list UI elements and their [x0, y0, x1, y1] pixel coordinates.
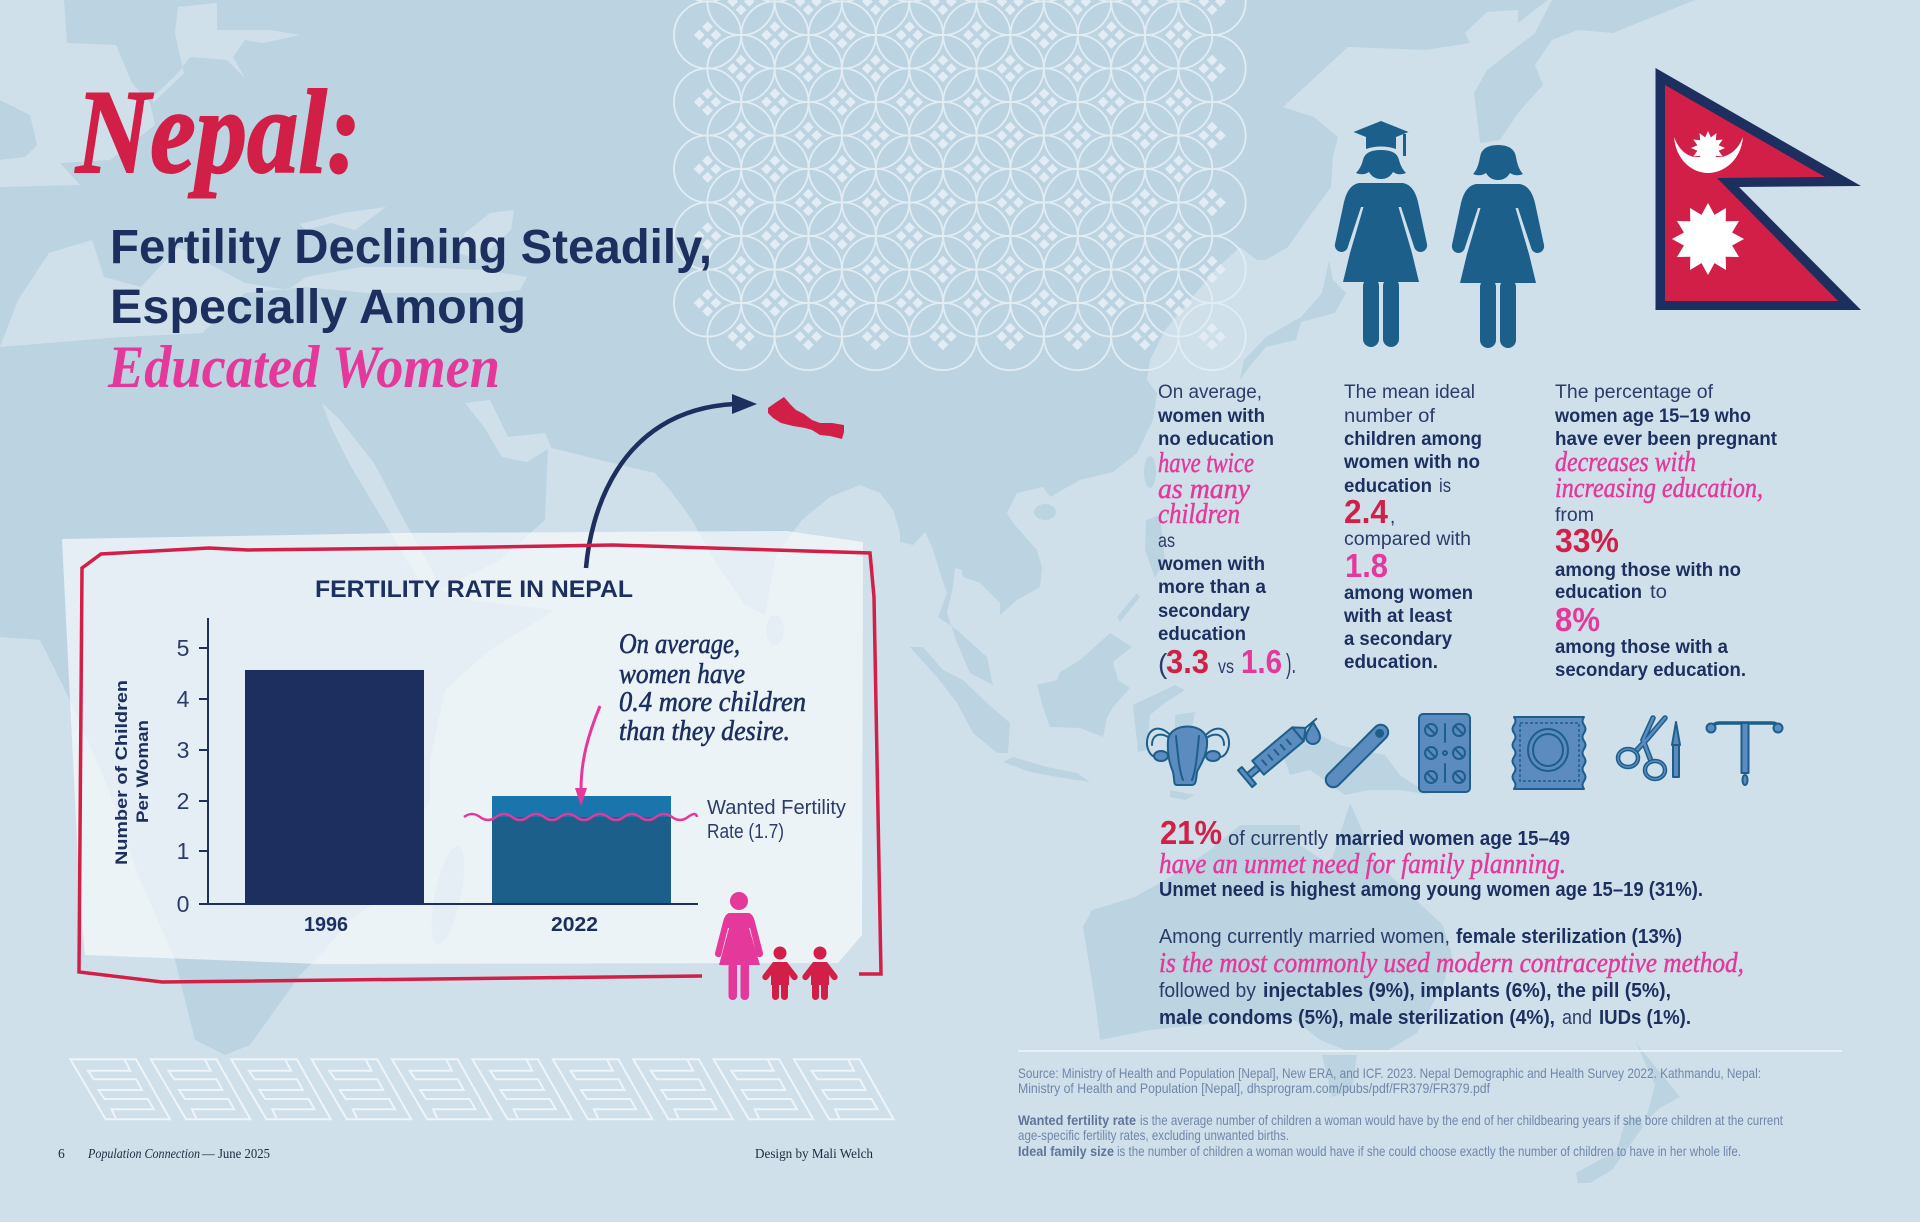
icon: woman	[1452, 145, 1544, 348]
chart panel backing	[62, 531, 863, 964]
text block: twice as many children: as	[1158, 531, 1175, 552]
text block: contraceptive use: is the most commonly used modern contraceptive method,	[1159, 947, 1744, 979]
text block: teen pregnancy by education: decreases with	[1555, 446, 1696, 478]
title: Nepal: Nepal:	[74, 65, 361, 198]
x-axis labels: 1996	[304, 914, 348, 936]
text block: twice as many children: as many	[1158, 473, 1250, 505]
wanted fertility label: Wanted Fertility	[707, 797, 846, 819]
bar: 1996	[245, 670, 424, 904]
x-axis labels: 2022	[551, 914, 598, 936]
icon: pill pack	[1419, 714, 1470, 792]
text block: twice as many children: no education	[1158, 429, 1274, 450]
text block: unmet need: 21%	[1160, 814, 1222, 851]
text block: teen pregnancy by education: women age 15–19 who	[1554, 406, 1751, 427]
icon: flag of Nepal	[1656, 68, 1861, 310]
text block: teen pregnancy by education: secondary education.	[1555, 660, 1746, 681]
y-axis tick labels: 2	[177, 788, 189, 814]
text block: mean ideal number of children: education	[1344, 476, 1432, 497]
y-axis tick labels: 1	[177, 838, 189, 864]
text block: twice as many children	[1157, 382, 1296, 680]
text block: mean ideal number of children	[1343, 382, 1482, 673]
text block: twice as many children: vs	[1218, 657, 1234, 678]
text block: unmet need: have an unmet need for family planning.	[1159, 848, 1566, 880]
subtitle: Fertility Declining Steadily,	[110, 221, 712, 274]
text block: twice as many children: more than a	[1158, 577, 1266, 598]
decorative circle lattice pattern	[674, 0, 1246, 370]
chart axes	[199, 618, 698, 904]
text block: teen pregnancy by education: increasing education,	[1555, 472, 1763, 504]
callout arrow	[575, 706, 600, 806]
text block: twice as many children: education	[1158, 624, 1246, 645]
y-axis tick labels: 4	[177, 686, 190, 712]
text block: mean ideal number of children: is	[1439, 476, 1451, 497]
text block: unmet need: married women age 15–49	[1335, 828, 1570, 850]
text block: twice as many children: women with	[1157, 554, 1265, 575]
bar chart	[112, 618, 846, 936]
text block: twice as many children: women with	[1157, 406, 1265, 427]
y-axis tick labels	[177, 635, 190, 917]
text block: contraceptive use: followed by	[1159, 980, 1256, 1002]
icon: IUD	[1706, 723, 1782, 785]
text block: unmet need: Unmet need is highest among young women age 15–19 (31%).	[1159, 879, 1703, 901]
wanted fertility label: Rate (1.7)	[707, 821, 784, 843]
icon: mother and two children	[715, 892, 838, 1000]
icon: scissors and scalpel (male sterilization)	[1618, 718, 1680, 779]
text block: mean ideal number of children: The mean ideal	[1344, 382, 1475, 403]
text block: mean ideal number of children: with at least	[1343, 606, 1453, 627]
text block: contraceptive use: IUDs (1%).	[1599, 1007, 1691, 1029]
decorative maze border	[70, 1059, 894, 1119]
callout: 0.4 more children: On average,	[619, 628, 740, 660]
text block: twice as many children: 3.3	[1166, 643, 1209, 680]
contraceptive method icons	[1147, 710, 1782, 792]
text block: teen pregnancy by education: to	[1650, 582, 1667, 603]
text block: teen pregnancy by education: 8%	[1555, 601, 1600, 638]
wanted fertility label	[707, 797, 846, 843]
text block: teen pregnancy by education: among those with no	[1555, 560, 1741, 581]
text block: mean ideal number of children: compared with	[1344, 529, 1471, 550]
text block: contraceptive use: female sterilization (13%)	[1456, 926, 1682, 948]
text block: mean ideal number of children: ,	[1390, 507, 1395, 528]
text block: teen pregnancy by education: education	[1555, 582, 1642, 603]
chart title: FERTILITY RATE IN NEPAL	[315, 576, 633, 603]
icon: condom packet	[1512, 717, 1586, 789]
text block: teen pregnancy by education	[1554, 382, 1778, 681]
callout: 0.4 more children: women have	[619, 658, 745, 690]
icon: Nepal map silhouette	[768, 397, 844, 439]
source note: Source: Ministry of Health and Population [Nepal], New ERA, and ICF. 2023. Nepal Demographic and Health Survey 2022. Kathmandu, Nepal:	[1018, 1065, 1761, 1081]
text block: mean ideal number of children: a secondary	[1344, 629, 1452, 650]
text block: teen pregnancy by education: from	[1555, 505, 1594, 526]
definitions note: Ideal family size	[1018, 1143, 1114, 1159]
footer left: Population Connection	[87, 1146, 200, 1161]
text block: teen pregnancy by education: 33%	[1555, 522, 1619, 559]
wanted fertility wavy line	[464, 814, 697, 820]
y-axis tick labels: 5	[177, 635, 189, 661]
text block: mean ideal number of children: among women	[1344, 583, 1473, 604]
text block: twice as many children: (	[1158, 648, 1168, 679]
definitions note: is the number of children a woman would have if she could choose exactly the number of children to have in her whole life.	[1117, 1143, 1741, 1159]
subtitle: Educated Women	[107, 334, 500, 400]
definitions note: is the average number of children a woman would have by the end of her childbearing years if she bore children at the current	[1140, 1112, 1783, 1128]
callout: 0.4 more children: than they desire.	[619, 715, 790, 747]
hand-drawn red chart frame	[79, 545, 881, 982]
callout: 0.4 more children	[619, 628, 806, 747]
footer left: — June 2025	[201, 1146, 270, 1161]
subtitle: Especially Among	[110, 281, 526, 334]
y-axis title: Number of Children	[112, 680, 131, 865]
arrow to Nepal map	[586, 394, 757, 568]
icon: educated woman with graduation cap	[1335, 121, 1427, 347]
text block: contraceptive use: male condoms (5%), male sterilization (4%),	[1159, 1007, 1555, 1029]
source note	[1018, 1065, 1761, 1096]
text block: twice as many children: secondary	[1158, 601, 1250, 622]
source note: Ministry of Health and Population [Nepal], dhsprogram.com/pubs/pdf/FR379/FR379.pdf	[1018, 1080, 1490, 1096]
text block: twice as many children: 1.6	[1241, 643, 1282, 680]
text block: teen pregnancy by education: The percentage of	[1555, 382, 1714, 403]
x-axis labels	[304, 914, 598, 936]
text block: unmet need: of currently	[1228, 828, 1328, 850]
text block: mean ideal number of children: 2.4	[1344, 493, 1389, 530]
text block: teen pregnancy by education: among those with a	[1555, 637, 1728, 658]
bar: 2022	[492, 796, 671, 904]
text block: mean ideal number of children: 1.8	[1345, 547, 1388, 584]
text block: twice as many children: have twice	[1158, 447, 1254, 479]
text block: twice as many children: children	[1158, 498, 1240, 530]
footer left: 6	[58, 1146, 65, 1161]
text block: mean ideal number of children: children among	[1344, 429, 1482, 450]
y-axis tick labels: 0	[177, 891, 189, 917]
text block: contraceptive use: Among currently married women,	[1159, 926, 1450, 948]
text block: contraceptive use: and	[1562, 1007, 1592, 1029]
icon: syringe (injectables)	[1238, 710, 1323, 787]
text block: mean ideal number of children: number of	[1344, 406, 1436, 427]
text block: mean ideal number of children: women with no	[1343, 452, 1480, 473]
callout: 0.4 more children: 0.4 more children	[619, 686, 806, 718]
definitions note: Wanted fertility rate	[1018, 1112, 1136, 1128]
subtitle	[107, 221, 712, 400]
text block: contraceptive use: injectables (9%), implants (6%), the pill (5%),	[1263, 980, 1671, 1002]
text block: contraceptive use	[1159, 926, 1744, 1029]
icon: implant	[1323, 722, 1391, 790]
text block: teen pregnancy by education: have ever been pregnant	[1555, 429, 1778, 450]
y-axis tick labels: 3	[177, 737, 189, 763]
definitions note: age-specific fertility rates, excluding unwanted births.	[1018, 1127, 1289, 1143]
text block: twice as many children: ).	[1286, 648, 1296, 679]
text block: twice as many children: On average,	[1158, 382, 1262, 403]
icon: female reproductive system (sterilization)	[1147, 726, 1229, 785]
text block: mean ideal number of children: education.	[1344, 652, 1438, 673]
y-axis title: Per Woman	[133, 720, 152, 823]
text block: unmet need	[1159, 814, 1703, 901]
footer credit: Design by Mali Welch	[755, 1146, 873, 1161]
footer left	[58, 1146, 270, 1161]
y-axis title	[112, 680, 152, 865]
definitions note	[1018, 1112, 1783, 1159]
